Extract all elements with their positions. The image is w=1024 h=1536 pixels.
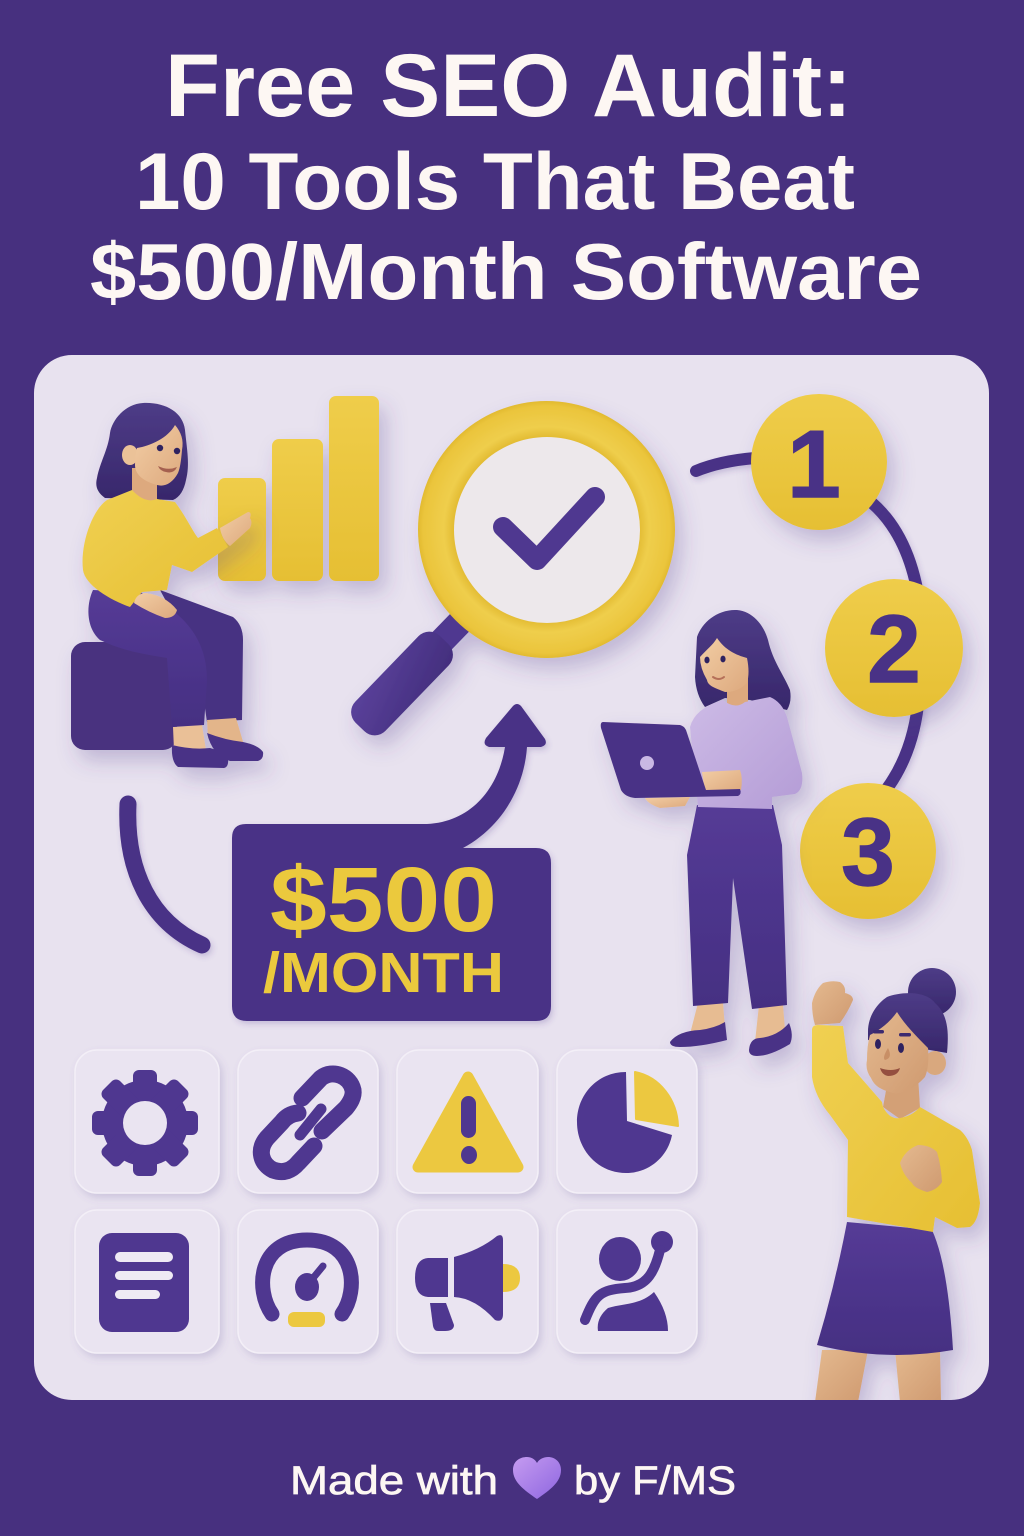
bun bbox=[908, 968, 956, 1016]
made with: Made with bbox=[290, 1459, 498, 1503]
tile: pie chart bbox=[557, 1050, 697, 1193]
step 3: 3 bbox=[841, 799, 895, 906]
skirt bbox=[817, 1222, 953, 1355]
chest fist bbox=[900, 1145, 942, 1192]
tile: gear bbox=[75, 1050, 219, 1193]
handle bbox=[345, 625, 459, 742]
step 2: 2 bbox=[867, 596, 921, 703]
lens bbox=[454, 437, 640, 623]
shoes bbox=[670, 1022, 727, 1047]
ankles bbox=[690, 1003, 725, 1034]
title bbox=[90, 35, 922, 316]
figure: seated woman bbox=[71, 403, 263, 768]
hair bbox=[868, 993, 948, 1053]
laptop logo bbox=[640, 756, 654, 770]
hand pointing bbox=[220, 512, 252, 546]
figure: standing woman with laptop bbox=[601, 610, 802, 1056]
block seat bbox=[71, 642, 177, 750]
numbered steps bbox=[751, 394, 963, 919]
ankles bbox=[173, 725, 206, 750]
laptop bbox=[601, 722, 741, 798]
tile: analytics person bbox=[557, 1210, 697, 1353]
sweater bbox=[83, 490, 228, 607]
back leg bbox=[160, 590, 243, 722]
check mark bbox=[503, 497, 595, 560]
hair bbox=[695, 610, 791, 710]
footer credit bbox=[290, 1457, 736, 1503]
face bbox=[700, 638, 748, 692]
lower hand bbox=[645, 797, 690, 808]
curved arrow tail bbox=[128, 804, 202, 945]
tile: document bbox=[75, 1210, 219, 1353]
icon tiles grid bbox=[75, 1050, 697, 1353]
legs bbox=[815, 1350, 868, 1402]
step 1: 1 bbox=[787, 411, 841, 518]
tile: speed gauge bbox=[238, 1210, 378, 1353]
face bbox=[866, 1012, 928, 1093]
pants bbox=[687, 805, 787, 1009]
step 3 bbox=[800, 783, 936, 919]
ear bbox=[924, 1051, 946, 1075]
price: $500 bbox=[270, 849, 497, 951]
lilac sweater bbox=[690, 697, 802, 809]
raised fist bbox=[812, 981, 853, 1025]
figure: cheering woman bbox=[812, 968, 980, 1402]
tile: link bbox=[238, 1050, 378, 1193]
upper hand bbox=[702, 770, 742, 792]
step 2 bbox=[825, 579, 963, 717]
front leg bbox=[88, 590, 207, 727]
price tag with growth arrow bbox=[232, 704, 551, 1021]
neck bbox=[883, 1075, 920, 1119]
bar chart bbox=[218, 396, 379, 581]
tile: megaphone bbox=[397, 1210, 538, 1353]
panel: illustration card bbox=[34, 355, 989, 1400]
sweater bbox=[812, 1025, 980, 1232]
hand on lap bbox=[134, 593, 177, 618]
hair bbox=[96, 403, 188, 500]
per month: /MONTH bbox=[263, 941, 504, 1005]
title: $500/Month Software bbox=[90, 227, 922, 316]
step 1 bbox=[751, 394, 887, 530]
icon: heart bbox=[513, 1457, 561, 1499]
magnifying glass bbox=[345, 401, 675, 742]
title: 10 Tools That Beat bbox=[135, 137, 855, 227]
face bbox=[135, 425, 183, 486]
tile: warning bbox=[397, 1050, 538, 1193]
title: Free SEO Audit: bbox=[165, 35, 852, 135]
by F/MS: by F/MS bbox=[574, 1459, 736, 1503]
neck bbox=[132, 468, 157, 504]
ear bbox=[122, 445, 138, 465]
neck bbox=[727, 678, 748, 708]
process connector bbox=[696, 458, 919, 790]
collar bbox=[438, 610, 472, 645]
shoes bbox=[207, 733, 263, 761]
ring bbox=[418, 401, 675, 658]
